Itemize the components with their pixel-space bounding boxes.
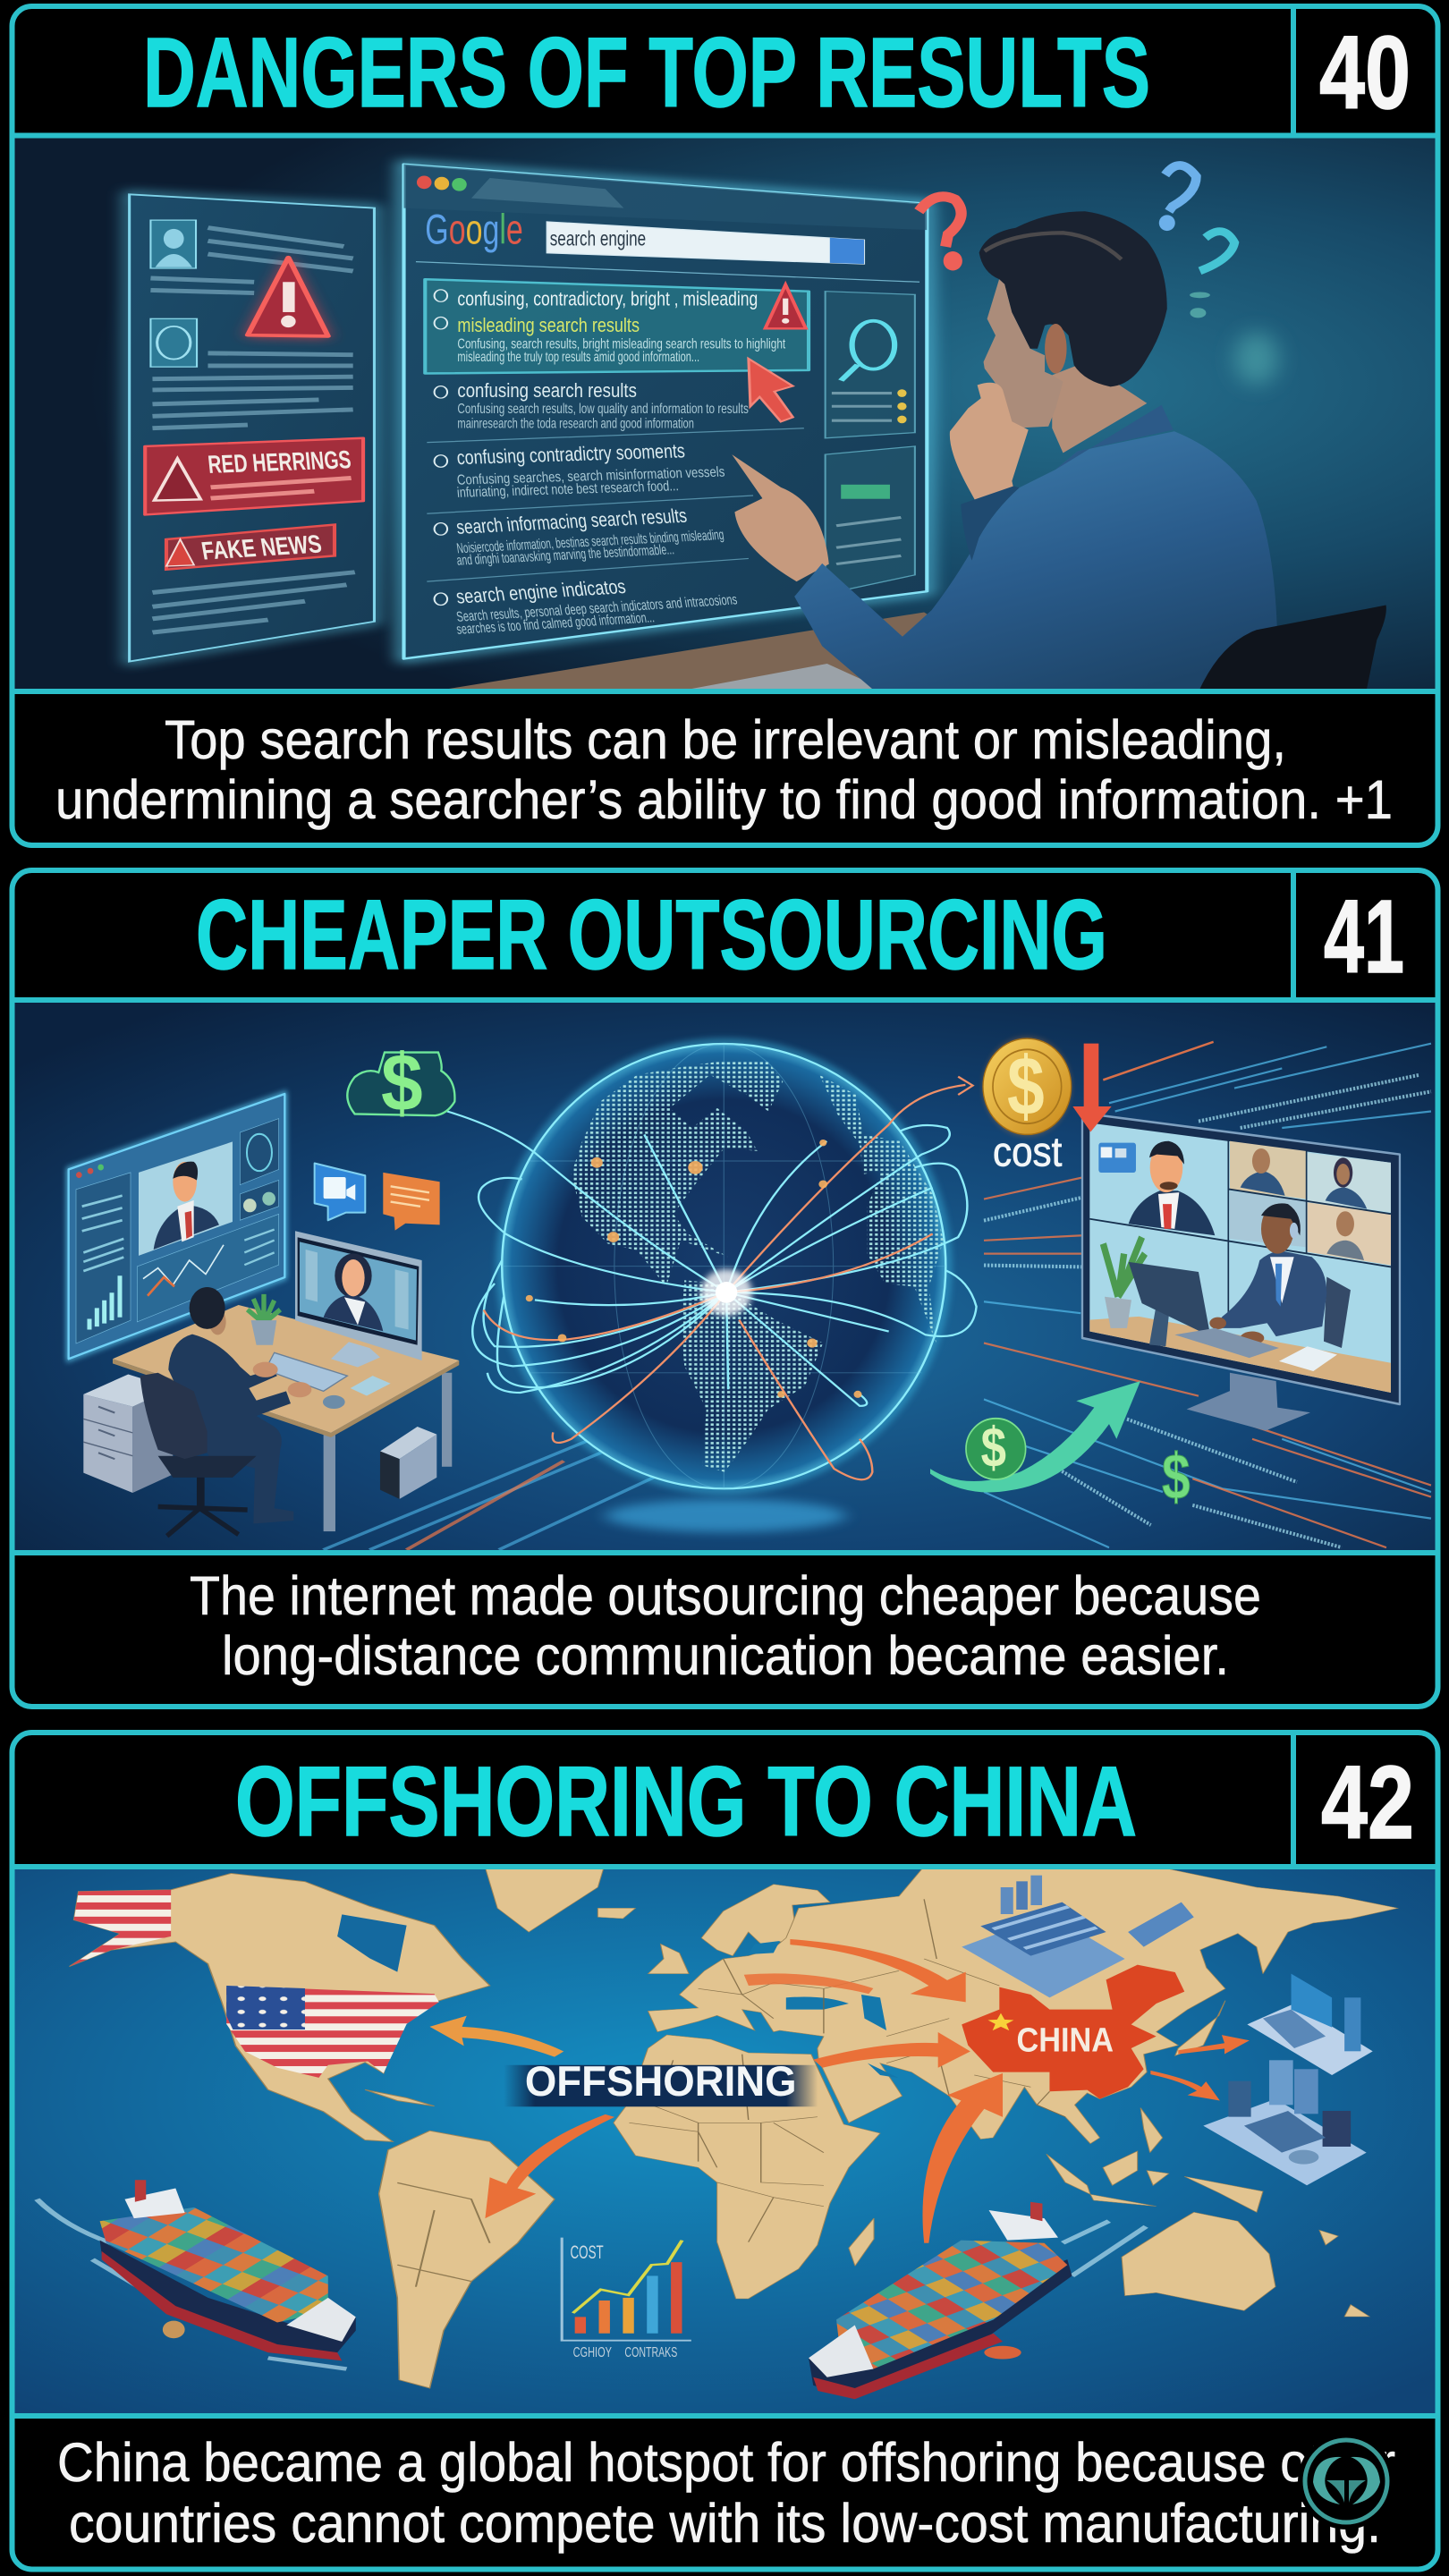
result rows: confusing search results (457, 379, 637, 402)
icon: green cloud dollar (347, 1038, 454, 1129)
frame (13, 6, 1438, 845)
right data streams (984, 1042, 1431, 1547)
logo badge (1298, 2433, 1394, 2529)
desktop tower (380, 1427, 436, 1499)
floor cabinet (83, 1374, 173, 1493)
raised sleeve (961, 486, 1020, 561)
fake news badge: FAKE NEWS (199, 530, 324, 565)
right video call scene (930, 1038, 1400, 1513)
illustration: man examining misleading search results: RED HERRINGS (207, 446, 352, 479)
fake news badge (166, 524, 335, 570)
office chair (140, 1373, 257, 1536)
desktop computer (1129, 1262, 1210, 1346)
caption (190, 1565, 1261, 1686)
icon: large red warning triangle (245, 255, 331, 338)
man thinking, seen from behind (794, 165, 1386, 693)
header bar (15, 1735, 1436, 1864)
globe with network arcs (447, 1038, 977, 1495)
result rows: mainresearch the toda research and good information (457, 415, 694, 431)
desk (113, 1305, 459, 1531)
China (962, 1965, 1184, 2099)
south america borders (397, 2182, 490, 2287)
number: 40 (1319, 14, 1411, 131)
caption: countries cannot compete with its low-cost manufacturing. (69, 2493, 1381, 2554)
result rows: Confusing searches, search misinformation vessels (456, 463, 725, 487)
result rows (435, 290, 749, 638)
small participants (1241, 1148, 1367, 1260)
cost chart: COST (570, 2242, 604, 2263)
shirt body and pointing sleeve (794, 431, 1277, 693)
panel: offshoring to china (0, 1733, 1449, 2569)
icon: gold coin: $ (1007, 1039, 1045, 1132)
highlighted result: misleading search results (457, 315, 640, 336)
title: OFFSHORING TO CHINA (235, 1747, 1137, 1857)
orange arcs (484, 1077, 973, 1479)
illustration: globe connecting remote workers (0, 996, 1449, 1560)
panel: dangers of top results (0, 6, 1449, 845)
caption: Top search results can be irrelevant or misleading, (165, 709, 1286, 770)
offshoring banner (504, 2057, 818, 2106)
hair (979, 211, 1167, 386)
highlighted result (425, 279, 809, 374)
seated man (168, 1287, 311, 1523)
caption: long-distance communication became easier. (222, 1625, 1229, 1686)
caption (55, 709, 1393, 830)
green coin (966, 1417, 1026, 1479)
header bar (15, 9, 1436, 132)
red question mark (919, 197, 962, 270)
lower left data streams (324, 1439, 665, 1550)
header rule (13, 1733, 1437, 2416)
monitor stand (1187, 1373, 1310, 1431)
left desk scene (69, 1038, 459, 1536)
cost chart: CGHIOY (573, 2344, 612, 2360)
icon: gold coin (983, 1038, 1072, 1136)
icon: green dollar: $ (1162, 1440, 1191, 1513)
browser window with results: Confusing search results, low quality and information to results (457, 401, 749, 417)
red herrings badge (145, 438, 363, 514)
neck (1052, 365, 1147, 453)
call tiles (1089, 1140, 1391, 1393)
blurred background light (1234, 332, 1278, 385)
header rule (13, 7, 1437, 691)
tech stations (1203, 1974, 1373, 2185)
cyan arcs (447, 1111, 977, 1406)
dotted continents (572, 1062, 944, 1472)
floor glow (606, 1499, 845, 1532)
illustration: world map of offshoring (0, 1860, 1449, 2424)
potted plant (248, 1294, 280, 1345)
caption background (15, 2419, 1436, 2567)
icon: video call (315, 1164, 365, 1220)
browser window with results (404, 165, 927, 658)
monitor frame (1082, 1113, 1400, 1404)
result rows: confusing contradictry sooments (456, 440, 686, 469)
central light burst (701, 1269, 752, 1316)
frame (13, 870, 1438, 1707)
face (984, 279, 1063, 428)
pointing hand (732, 454, 829, 581)
cost chart (562, 2238, 691, 2360)
country borders (629, 1899, 1065, 2242)
illustration: world map of offshoring: CONTRAKS (624, 2344, 677, 2360)
blue question mark (1159, 165, 1196, 231)
browser window with results: Noisiercode information, bestinas search results binding misleading (455, 526, 724, 556)
hudson bay (337, 1914, 407, 1972)
small warning triangle (765, 284, 806, 328)
caption (57, 2432, 1395, 2554)
USA flag country (226, 1986, 439, 2078)
offshoring banner: OFFSHORING (525, 2057, 797, 2106)
header bar (15, 873, 1436, 997)
inland seas (749, 1941, 899, 2078)
americas (69, 1873, 555, 2388)
header rule (13, 871, 1437, 1553)
illustration: man examining misleading search results (0, 131, 1449, 695)
title: CHEAPER OUTSOURCING (196, 880, 1107, 990)
China label and star: CHINA (1017, 2021, 1114, 2059)
chair (1198, 606, 1386, 693)
meridians (502, 1044, 945, 1488)
monitor with video call (295, 1231, 422, 1368)
sidebar panels (826, 292, 915, 594)
eurasia, africa and oceania (485, 1867, 1398, 2317)
hot spots (526, 1140, 861, 1398)
browser window with results: Confusing, search results, bright misleading search results to highlight (457, 335, 785, 352)
call participant blue tag (1098, 1143, 1136, 1173)
result rows: search engine indicatos (454, 576, 627, 608)
China label and star (987, 2013, 1114, 2059)
cost label: cost (993, 1130, 1062, 1175)
icon: green cloud dollar: $ (381, 1038, 423, 1129)
wall screen (69, 1094, 284, 1359)
small buoy (163, 2321, 185, 2338)
main participant (1129, 1141, 1215, 1235)
result rows: search informacing search results (455, 504, 688, 538)
highlighted result: confusing, contradictory, bright , misleading (457, 288, 758, 310)
result rows: searches is too find calmed good information... (455, 609, 656, 638)
keyboard and mouse (266, 1352, 391, 1409)
ear (1045, 324, 1067, 374)
red down arrow (1072, 1044, 1112, 1131)
search box: search engine (550, 226, 646, 250)
result rows: infuriating, indirect note best research food... (456, 478, 679, 500)
Alaska flag (69, 1890, 171, 1967)
caption background (15, 1555, 1436, 1704)
collar (1055, 405, 1174, 470)
caption: The internet made outsourcing cheaper because (190, 1565, 1261, 1626)
red cursor arrow (749, 359, 792, 421)
cargo ship right (809, 2202, 1146, 2399)
potted plant (1103, 1237, 1145, 1328)
desk and keyboard (449, 612, 927, 689)
google logo: Google (425, 206, 523, 253)
cargo ship left (37, 2180, 356, 2369)
growth arrow (930, 1381, 1140, 1492)
keyboard and notepad (1174, 1328, 1337, 1371)
number: 41 (1324, 878, 1404, 995)
browser window with results: Search results, personal deep search indicators and intracosions (455, 591, 738, 624)
highlighted result: misleading the truly top results amid good information... (457, 349, 699, 365)
number: 42 (1321, 1744, 1414, 1860)
caption background (15, 694, 1436, 843)
offshoring arrows (429, 1939, 1250, 2243)
faded marks (1190, 292, 1210, 318)
search box (547, 222, 864, 264)
frame (13, 1733, 1438, 2569)
hand on chin (950, 383, 1029, 504)
panel: cheaper outsourcing (0, 870, 1449, 1707)
left document panel (130, 194, 374, 662)
result rows: and dinghi toanavsking marving the bestindormable... (455, 541, 675, 568)
green coin: $ (981, 1417, 1006, 1479)
factory (962, 1876, 1194, 1997)
icon: orange chat (383, 1173, 440, 1231)
lower participant with headset (1209, 1203, 1351, 1348)
teal question mark (1199, 232, 1234, 271)
